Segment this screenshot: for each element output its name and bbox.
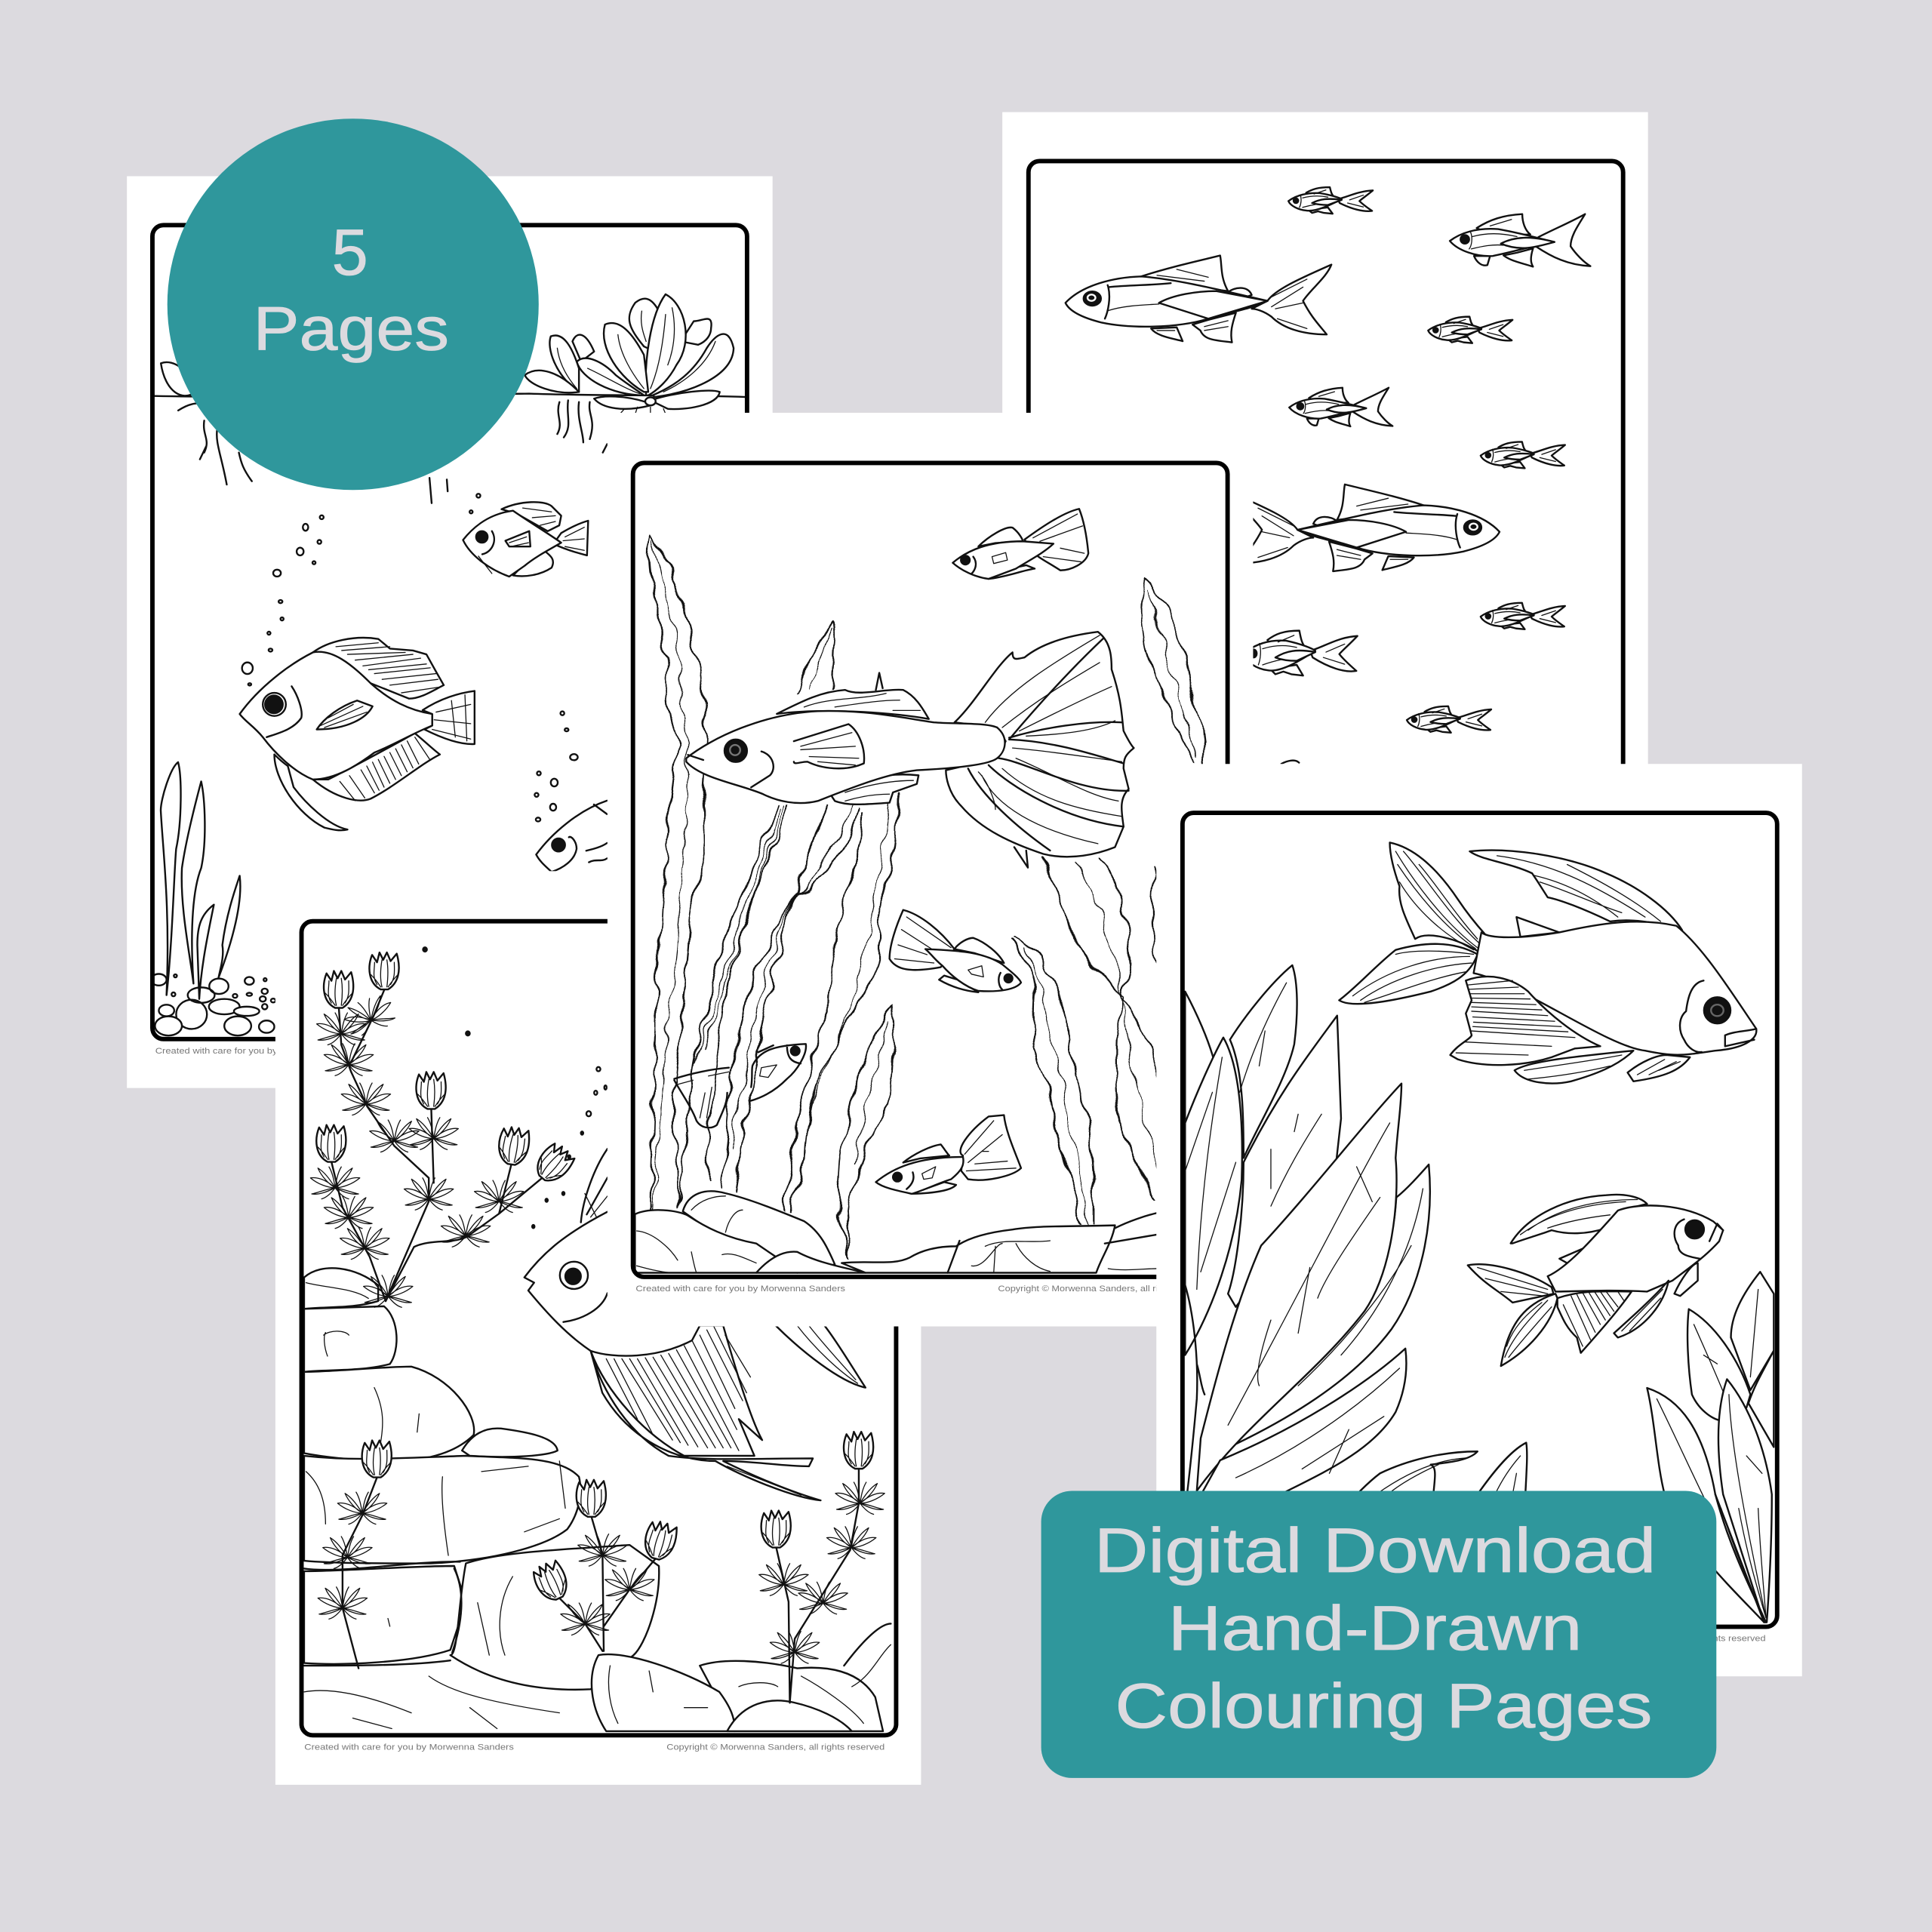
main guppy [686,632,1134,868]
footer copyright: Copyright © Morwenna Sanders, all rights reserved [998,1284,1216,1294]
small goldfish [1468,1195,1723,1366]
footer credit: Created with care for you by Morwenna Sanders [635,1284,845,1294]
frame [302,921,896,1735]
artwork: floating plants at the water line [151,294,746,1035]
badge: 5 pages [168,118,539,490]
frame [1029,161,1623,975]
panel: colouring page with guppies and kelp [608,413,1253,1327]
artwork: guppies, kelp and rocks [635,509,1205,1273]
rocks [635,1191,1187,1273]
panel: colouring page with school of tetras [1002,112,1648,764]
footer copyright: Copyright © Morwenna Sanders, all rights reserved [1548,1635,1766,1644]
large goldfish [1339,842,1756,1084]
frame [152,225,747,1039]
panel: colouring page with goldfish and broad leaves [1156,764,1802,1676]
artwork: goldfish and leaves [1185,842,1774,1623]
broad leaves left [1185,965,1527,1552]
middle guppy [890,910,1021,992]
banner: digital download: Colouring Pages [1115,1671,1652,1741]
badge: 5 pages: 5 [332,217,368,289]
panel: colouring page with rocks, sprigs and angelfish [275,871,921,1785]
leaves bottom right [1647,1272,1774,1623]
badge: 5 pages: Pages [254,295,449,364]
footer copyright: Copyright © Morwenna Sanders, all rights reserved [666,1743,884,1752]
hidden guppy behind kelp [674,1044,806,1128]
artwork: rocks and fish [304,947,891,1731]
banner: digital download: Hand-Drawn [1168,1593,1582,1663]
panel: colouring page with angelfish and floating plants [127,176,773,1088]
artwork: angelfish, bubbles and pebbles [151,494,607,1035]
small guppy top [952,509,1088,579]
lower guppy [876,1115,1021,1194]
frame [1183,813,1777,1627]
footer credit: Created with care for you by Morwenna Sanders [155,1047,365,1056]
banner: digital download [1041,1491,1716,1778]
artwork: tetra fish [1066,187,1590,764]
banner: digital download: Digital Download [1094,1515,1656,1586]
kelp leaves [648,534,1205,1257]
footer credit: Created with care for you by Morwenna Sanders [304,1743,514,1752]
artwork: flowering water sprigs [310,952,884,1703]
frame [633,463,1228,1277]
